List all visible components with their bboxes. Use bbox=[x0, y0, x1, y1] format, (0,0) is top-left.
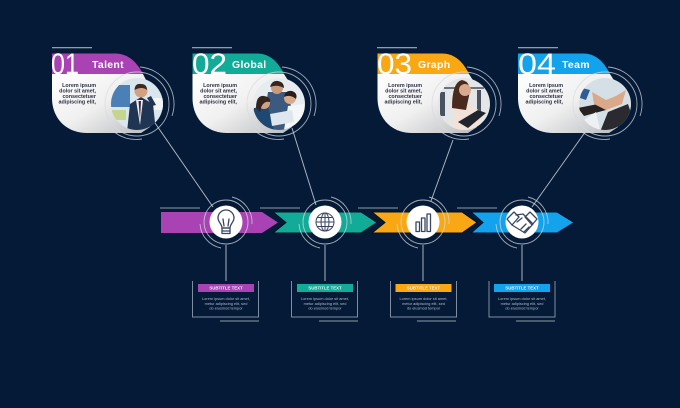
card 1 number: 01 bbox=[51, 48, 79, 81]
card 3: Graph bbox=[377, 47, 501, 140]
arrow 1: purple bbox=[161, 212, 278, 233]
card 2 text: consectetuer bbox=[203, 94, 238, 100]
card 3 text: dolor sit amet, bbox=[385, 88, 423, 94]
card 1 top rule bbox=[52, 47, 92, 48]
card 4: Team bbox=[518, 47, 642, 140]
box 1 frame bbox=[192, 281, 258, 317]
card 1 text: dolor sit amet, bbox=[59, 88, 97, 94]
box 2 frame bbox=[292, 281, 358, 317]
box 2 text: metur adipiscing elit, sed bbox=[304, 301, 346, 306]
card 4 header bbox=[518, 54, 610, 74]
card 1 photo bbox=[110, 78, 164, 132]
vertical stems to subtitle boxes bbox=[226, 245, 522, 281]
card 2 text: Lorem ipsum bbox=[203, 83, 237, 89]
card 1 label: Talent bbox=[92, 59, 124, 71]
card 3 rings bbox=[432, 67, 501, 140]
card 3 text: consectetuer bbox=[388, 94, 423, 100]
card 2 text: adipiscing elit, bbox=[200, 100, 237, 106]
box 4 text: Lorem ipsum dolor sit amet, bbox=[498, 296, 546, 301]
card 1: Talent bbox=[51, 47, 174, 140]
box 1 text: Lorem ipsum dolor sit amet, bbox=[202, 296, 250, 301]
card 3 body bbox=[378, 74, 477, 133]
icon node 1: light bulb bbox=[200, 197, 252, 248]
box 1 tag bbox=[198, 284, 254, 292]
globe glyph bbox=[316, 213, 334, 231]
subtitle box 1 bbox=[192, 281, 259, 322]
box 3 frame bbox=[390, 281, 456, 317]
card 2 text: dolor sit amet, bbox=[200, 88, 238, 94]
subtitle box 3 bbox=[390, 281, 456, 322]
card 1 header bbox=[52, 54, 143, 74]
card 3 number: 03 bbox=[377, 48, 412, 81]
card 4 label: Team bbox=[562, 59, 590, 71]
card 3 photo bbox=[437, 78, 491, 130]
arrow 3: orange bbox=[372, 212, 477, 233]
card 3 top rule bbox=[377, 47, 417, 48]
box 3 tag bbox=[396, 284, 452, 292]
card 4 top rule bbox=[518, 47, 558, 48]
box 1 heading: SUBTITLE TEXT bbox=[209, 286, 243, 290]
box 4 text: metur adipiscing elit, sed bbox=[501, 301, 543, 306]
card 3 text: Lorem ipsum bbox=[388, 83, 422, 89]
timeline rules above arrows bbox=[160, 208, 497, 209]
box 4 tag bbox=[494, 284, 550, 292]
icon node 3: bar chart bbox=[397, 197, 449, 248]
card 3 header bbox=[378, 54, 469, 74]
arrow 4: blue bbox=[471, 212, 574, 233]
box 3 text: Lorem ipsum dolor sit amet, bbox=[399, 296, 448, 301]
box 3 text: metur adipiscing elit, sed bbox=[402, 301, 445, 306]
box 2 tag bbox=[297, 284, 353, 292]
icon node 2: globe bbox=[299, 197, 351, 248]
card 4 rings bbox=[573, 67, 642, 140]
card 2 body bbox=[192, 74, 292, 133]
chart glyph bbox=[416, 214, 430, 232]
card 3 text: adipiscing elit, bbox=[385, 100, 422, 106]
card 3 label: Graph bbox=[418, 59, 450, 71]
card 4 text: dolor sit amet, bbox=[526, 88, 564, 94]
card 4 body bbox=[518, 74, 618, 133]
box 1 text: metur adipiscing elit, sed bbox=[205, 301, 247, 306]
card 4 text: Lorem ipsum bbox=[529, 83, 563, 89]
card 2 number: 02 bbox=[192, 48, 227, 81]
card 2 header bbox=[192, 54, 284, 74]
box 1 rule bbox=[220, 320, 259, 322]
arrow 2: green bbox=[273, 212, 377, 233]
box 2 text: Lorem ipsum dolor sit amet, bbox=[301, 296, 349, 301]
box 3 text: do eiusmod tempor bbox=[407, 306, 441, 311]
box 2 rule bbox=[319, 320, 358, 322]
box 4 frame bbox=[489, 281, 555, 317]
icon node 4: handshake bbox=[496, 197, 548, 248]
box 4 heading: SUBTITLE TEXT bbox=[505, 286, 539, 290]
card 1 rings bbox=[105, 67, 174, 140]
box 3 heading: SUBTITLE TEXT bbox=[407, 286, 440, 290]
box 2 heading: SUBTITLE TEXT bbox=[308, 286, 342, 290]
connector lines from cards to timeline bbox=[155, 123, 588, 207]
box 4 rule bbox=[516, 320, 555, 322]
card 4 text: adipiscing elit, bbox=[526, 100, 563, 106]
card 1 text: consectetuer bbox=[62, 94, 97, 100]
card 2 photo bbox=[254, 78, 305, 130]
box 4 text: do eiusmod tempor bbox=[505, 306, 539, 311]
box 2 text: do eiusmod tempor bbox=[308, 306, 342, 311]
card 4 text: consectetuer bbox=[529, 94, 564, 100]
card 2: Global bbox=[192, 47, 316, 140]
card 1 text: Lorem ipsum bbox=[62, 83, 96, 89]
handshake glyph bbox=[507, 212, 537, 233]
box 1 text: do eiusmod tempor bbox=[209, 306, 243, 311]
subtitle box 2 bbox=[292, 281, 358, 322]
card 2 label: Global bbox=[232, 59, 266, 71]
bulb glyph bbox=[218, 210, 234, 234]
card 2 top rule bbox=[192, 47, 232, 48]
card 1 body bbox=[52, 74, 150, 133]
card 1 text: adipiscing elit, bbox=[59, 100, 96, 106]
card 4 photo bbox=[578, 78, 632, 132]
subtitle box 4 bbox=[489, 281, 555, 322]
infographic canvas bbox=[52, 47, 642, 322]
box 3 rule bbox=[417, 320, 456, 322]
card 2 rings bbox=[247, 67, 316, 140]
card 4 number: 04 bbox=[518, 48, 556, 81]
